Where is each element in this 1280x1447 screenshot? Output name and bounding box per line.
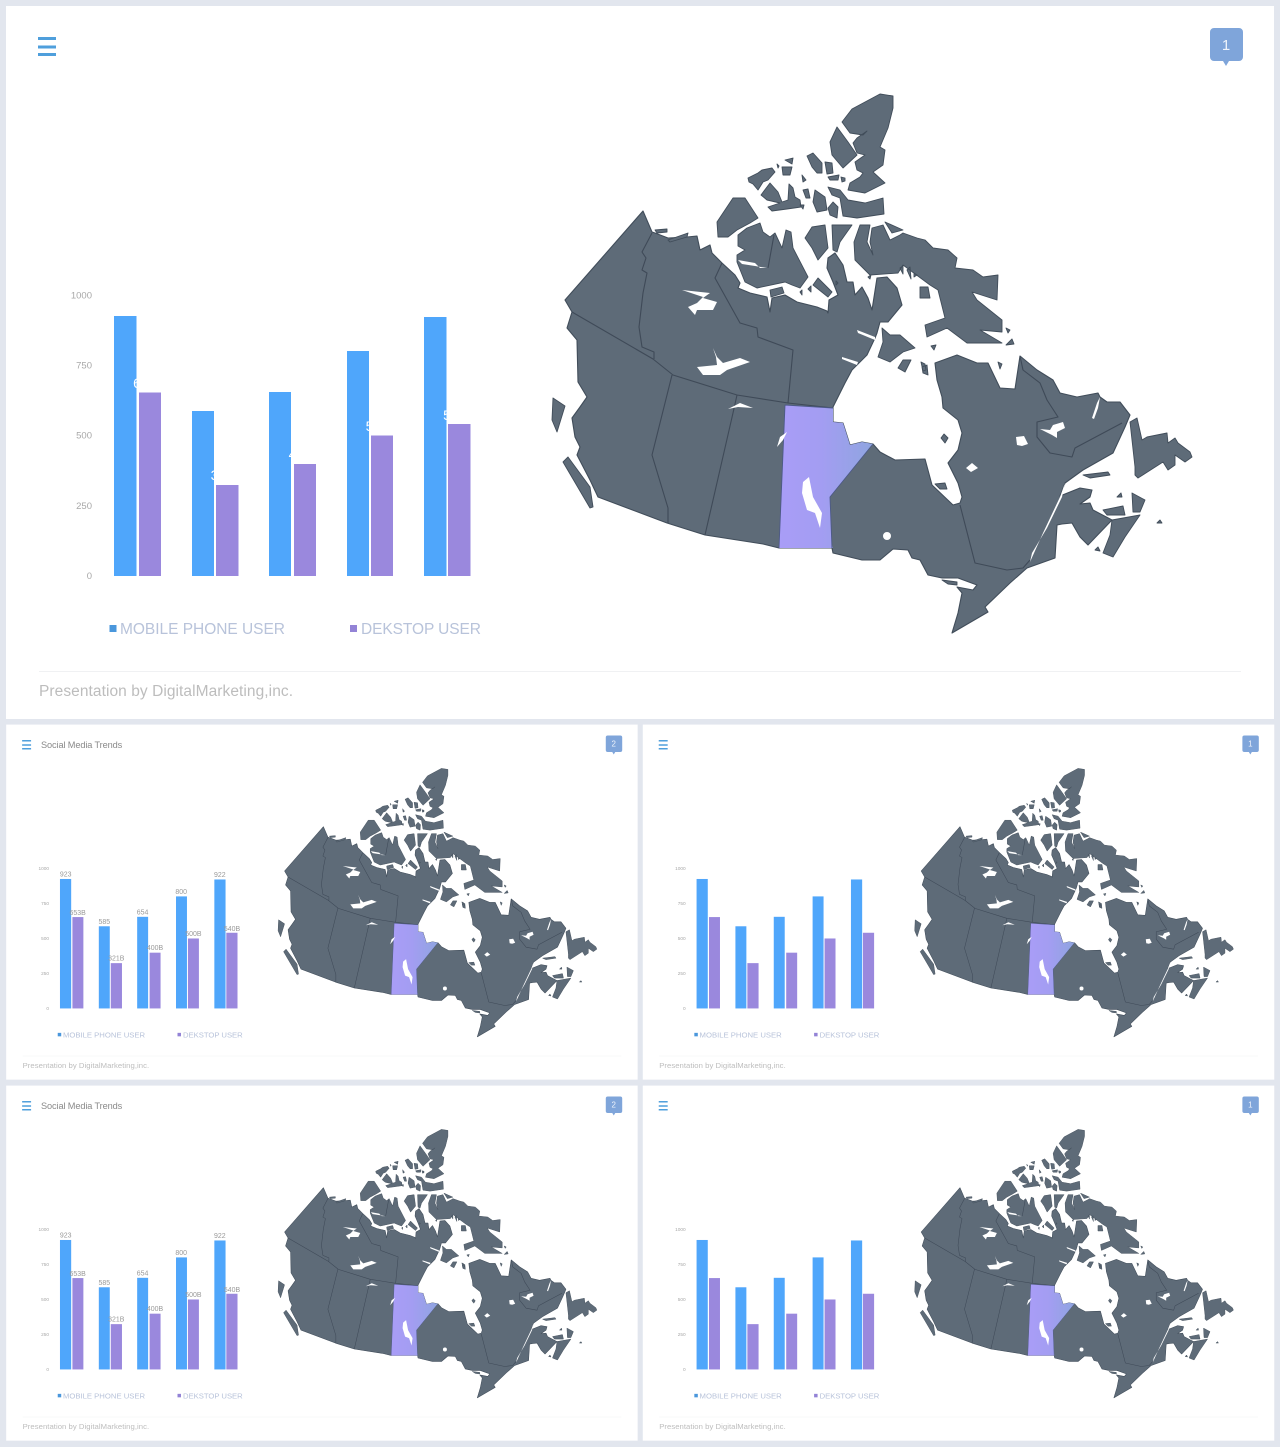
icon: hamburger menu	[659, 740, 668, 749]
lakes and water cut-outs	[682, 260, 1100, 562]
bar chart: 1000	[39, 866, 49, 872]
bar chart: 750	[41, 1262, 49, 1268]
icon: hamburger menu	[659, 1101, 668, 1110]
bar chart: MOBILE PHONE USER	[700, 1030, 782, 1039]
badge: slide number	[1242, 736, 1259, 754]
footer text: Presentation by DigitalMarketing,inc.	[659, 1061, 786, 1070]
bar chart: 0	[46, 1006, 49, 1012]
bar chart: 654	[137, 1270, 149, 1277]
bar chart: 250	[41, 971, 49, 977]
bar chart: 500	[41, 1297, 49, 1303]
bar chart: 540B	[224, 1287, 241, 1294]
bar chart: DEKSTOP USER	[183, 1391, 243, 1400]
footer text: Presentation by DigitalMarketing,inc.	[659, 1422, 786, 1431]
y axis labels: 0	[87, 571, 92, 582]
bar chart: MOBILE PHONE USER	[63, 1030, 146, 1039]
bar chart: 653B	[70, 1271, 86, 1278]
bar chart: 400B	[147, 945, 164, 952]
bar chart: 321B	[108, 1317, 125, 1324]
bar chart: 922	[214, 872, 226, 879]
bar chart: 0	[683, 1006, 686, 1012]
badge: slide number	[1242, 1097, 1259, 1115]
hidden white value labels: 653B	[133, 375, 166, 391]
bar chart: 653B	[70, 910, 86, 917]
bar chart: 800	[175, 889, 187, 896]
bar chart: 500	[678, 1297, 686, 1303]
bar chart: MOBILE PHONE USER	[63, 1391, 146, 1400]
icon: hamburger menu	[22, 740, 31, 749]
bar chart: 585	[98, 1280, 110, 1287]
bar chart: 500B	[185, 931, 202, 938]
mainland Canada	[565, 211, 1130, 633]
bar chart: users by group	[71, 290, 481, 638]
badge: slide number: 2	[612, 1100, 617, 1109]
bar chart: 0	[683, 1367, 686, 1373]
bar chart: DEKSTOP USER	[820, 1030, 880, 1039]
bar chart: 321B	[108, 956, 125, 963]
legend: desktop user: DEKSTOP USER	[361, 621, 481, 638]
badge: slide number	[606, 736, 622, 754]
y axis labels: 1000	[71, 290, 92, 302]
bar chart: 540B	[224, 926, 241, 933]
footer text: Presentation by DigitalMarketing,inc.	[23, 1061, 149, 1070]
map: Canada with Manitoba highlighted	[552, 94, 1192, 633]
legend: mobile phone user: MOBILE PHONE USER	[120, 621, 285, 638]
hidden white value labels	[133, 375, 476, 483]
bar chart	[675, 1227, 880, 1400]
heading: Social Media Trends	[41, 1101, 123, 1111]
hidden white value labels: 500B	[366, 418, 398, 434]
y axis labels: 500	[76, 430, 92, 442]
bar chart: 923	[60, 871, 72, 878]
slide: main large slide	[6, 6, 1274, 719]
bar chart: MOBILE PHONE USER	[700, 1391, 782, 1400]
bar chart: 1000	[39, 1227, 49, 1233]
heading: Social Media Trends	[41, 740, 123, 750]
bar chart: 400B	[147, 1306, 164, 1313]
bar chart: 800	[175, 1250, 187, 1257]
bar chart: 585	[98, 919, 110, 926]
bar chart: 250	[678, 1332, 686, 1338]
bar chart	[39, 866, 243, 1039]
bar chart: 750	[678, 1262, 686, 1268]
hidden white value labels: 540B	[443, 407, 476, 423]
map: Canada	[915, 768, 1233, 1037]
slide: small slide bottom left	[6, 1086, 638, 1441]
highlighted province: Manitoba	[779, 405, 873, 548]
badge: slide number: 1	[1248, 1100, 1253, 1109]
bar chart	[39, 1227, 243, 1400]
purple bars	[139, 392, 470, 576]
bar chart: 750	[678, 901, 686, 907]
badge: slide number: 1	[1248, 739, 1253, 748]
footer text: Presentation by DigitalMarketing,inc.	[23, 1422, 149, 1431]
map: Canada	[915, 1129, 1233, 1398]
bar chart: 1000	[675, 866, 686, 872]
hidden white value labels: 400B	[289, 446, 321, 462]
map: Canada	[278, 1129, 597, 1398]
blue bars	[114, 316, 446, 576]
icon: hamburger menu	[22, 1101, 31, 1110]
bar chart: DEKSTOP USER	[183, 1030, 243, 1039]
bar chart	[675, 866, 880, 1039]
arctic and coastal islands	[552, 94, 1192, 585]
bar chart: 922	[214, 1233, 226, 1240]
bar chart: 923	[60, 1232, 72, 1239]
slide: small slide top right	[643, 725, 1274, 1080]
footer text: Presentation by DigitalMarketing,inc.	[39, 683, 293, 700]
bar chart: DEKSTOP USER	[820, 1391, 880, 1400]
badge: slide number: 1	[1222, 37, 1230, 54]
hidden white value labels: 321B	[211, 467, 243, 483]
map: Canada	[278, 768, 597, 1037]
y axis labels: 750	[76, 360, 92, 372]
y axis labels	[71, 290, 92, 582]
bar chart: 500B	[185, 1292, 202, 1299]
icon: hamburger menu	[38, 37, 56, 56]
bar chart: 250	[678, 971, 686, 977]
bar chart: 0	[46, 1367, 49, 1373]
bar chart: 250	[41, 1332, 49, 1338]
bar chart: 1000	[675, 1227, 686, 1233]
slide: small slide top left	[6, 725, 638, 1080]
bar chart: 500	[678, 936, 686, 942]
bar chart: 750	[41, 901, 49, 907]
province borders	[572, 233, 1122, 570]
bar chart: 654	[137, 909, 149, 916]
bar chart: 500	[41, 936, 49, 942]
badge: slide number: 2	[612, 739, 617, 748]
badge: slide number	[1210, 28, 1243, 66]
slide: small slide bottom right	[643, 1086, 1274, 1441]
badge: slide number	[606, 1097, 622, 1115]
y axis labels: 250	[76, 501, 92, 512]
